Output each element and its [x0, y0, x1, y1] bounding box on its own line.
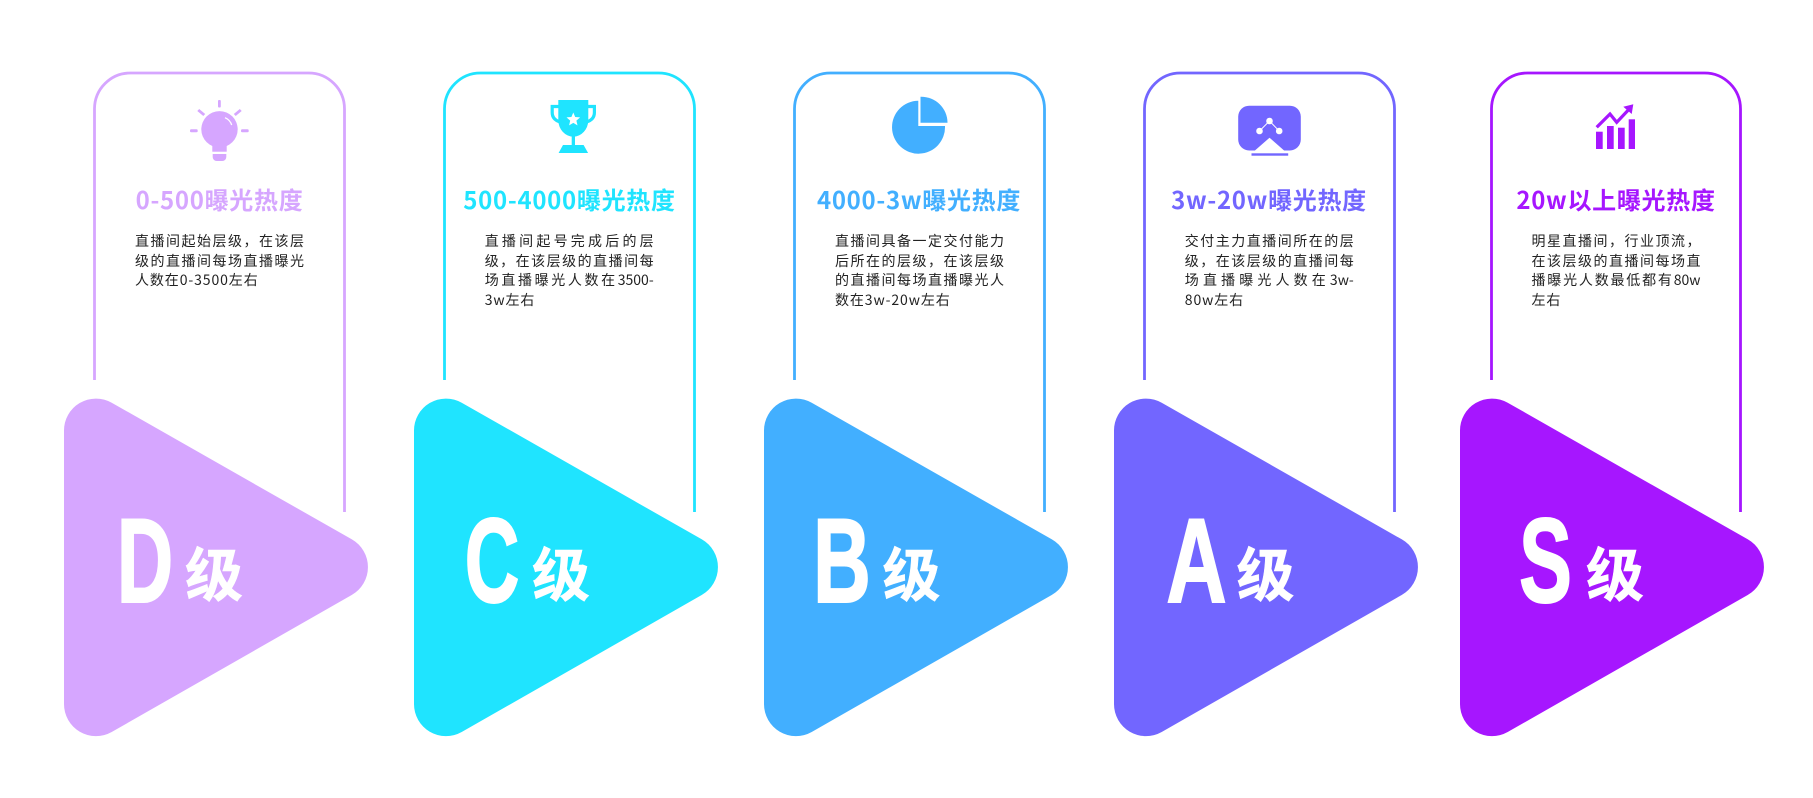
triangle badge: B [764, 398, 1068, 736]
triangle badge: S: S [1519, 493, 1572, 628]
panel: D tier [64, 72, 368, 736]
panel: S tier [1460, 72, 1764, 736]
text: S tier description: 在该层级的直播间每场直 [1532, 251, 1700, 271]
panel: A tier [1114, 72, 1418, 736]
text: C tier description: 3w左右 [485, 290, 535, 310]
text: S tier description: 左右 [1532, 290, 1561, 310]
heading: C tier: 500-4000曝光热度 [463, 180, 676, 216]
text: D tier description: 人数在0-3500左右 [135, 270, 259, 290]
heading: A tier: 3w-20w曝光热度 [1171, 180, 1367, 216]
text: A tier description [1185, 231, 1354, 310]
icon: growth chart [1596, 104, 1635, 149]
text: B tier description: 后所在的层级，在该层级 [835, 251, 1004, 271]
text: C tier description: 级，在该层级的直播间每 [485, 251, 654, 271]
triangle badge: C: 级 [532, 529, 590, 613]
triangle badge: A [1114, 398, 1418, 736]
text: B tier description [835, 231, 1004, 310]
text: C tier description: 直播间起号完成后的层 [485, 231, 654, 251]
text: S tier description: 明星直播间，行业顶流， [1532, 231, 1700, 251]
triangle badge: S: 级 [1586, 529, 1644, 613]
icon: pie chart [892, 96, 948, 154]
triangle badge: A: A [1166, 493, 1226, 628]
text: C tier description: 场直播曝光人数在3500- [485, 270, 654, 290]
text: A tier description: 级，在该层级的直播间每 [1185, 251, 1354, 271]
text: D tier description [135, 231, 304, 290]
icon: monitor with network [1238, 106, 1301, 156]
triangle badge: D: 级 [185, 529, 243, 613]
text: A tier description: 交付主力直播间所在的层 [1185, 231, 1354, 251]
panel: B tier [764, 72, 1068, 736]
heading: B tier: 4000-3w曝光热度 [817, 180, 1021, 216]
text: A tier description: 80w左右 [1185, 290, 1244, 310]
triangle badge: A: 级 [1236, 529, 1294, 613]
card outline: S [1490, 72, 1742, 512]
text: A tier description: 场直播曝光人数在3w- [1185, 270, 1354, 290]
text: B tier description: 数在3w-20w左右 [835, 290, 951, 310]
triangle badge: B: B [813, 494, 870, 628]
heading: D tier: 0-500曝光热度 [136, 180, 303, 216]
panel: C tier [414, 72, 718, 736]
text: B tier description: 的直播间每场直播曝光人 [835, 270, 1004, 290]
triangle badge: B: 级 [882, 529, 940, 613]
card outline: B [793, 72, 1046, 512]
card outline: A [1143, 72, 1396, 512]
text: D tier description: 直播间起始层级，在该层 [135, 231, 304, 251]
triangle badge: S [1460, 398, 1764, 736]
text: S tier description: 播曝光人数最低都有80w [1532, 270, 1700, 290]
text: B tier description: 直播间具备一定交付能力 [835, 231, 1004, 251]
triangle badge: D: D [117, 494, 173, 628]
text: C tier description [485, 231, 654, 310]
triangle badge: C: C [465, 494, 519, 628]
heading: S tier: 20w以上曝光热度 [1516, 180, 1716, 216]
text: D tier description: 级的直播间每场直播曝光 [135, 251, 304, 271]
text: S tier description [1532, 231, 1700, 310]
